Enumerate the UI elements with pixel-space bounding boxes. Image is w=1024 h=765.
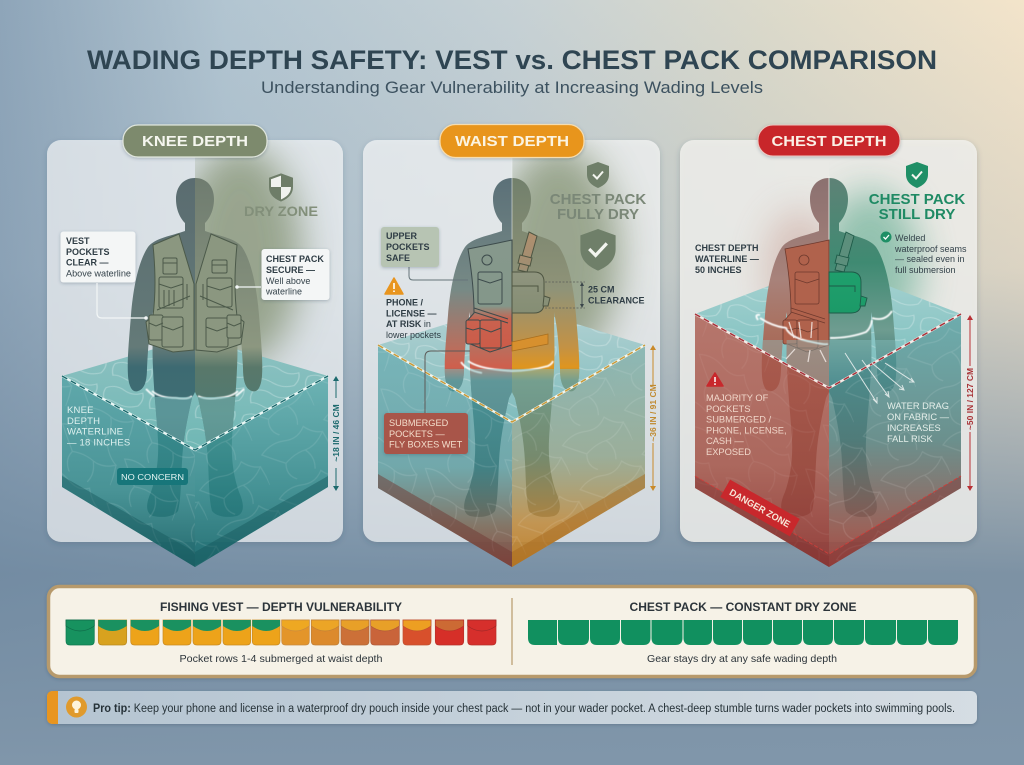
label: vest pockets clear: POCKETS (66, 247, 110, 257)
water cube (378, 345, 645, 567)
label: submerged pockets: SUBMERGED (389, 418, 449, 428)
shallow water overlay on legs (444, 369, 580, 416)
label: chest pack secure (262, 249, 330, 300)
banner: danger zone: DANGER ZONE (727, 487, 792, 530)
heading: chest pack fully dry: CHEST PACK (550, 191, 646, 208)
water surface (378, 304, 645, 422)
title: WADING DEPTH SAFETY: VEST vs. CHEST PACK COMPARISON (87, 45, 937, 75)
fishing vest half (783, 240, 829, 352)
icon: green shield (906, 162, 928, 188)
icon: large shield check (580, 229, 616, 271)
clearance marker: CLEARANCE (588, 296, 645, 306)
label: upper pockets safe: SAFE (386, 253, 410, 263)
panel: waist depth (363, 140, 660, 567)
caption: vest: Pocket rows 1-4 submerged at waist depth (180, 653, 383, 665)
text: chest depth waterline: CHEST DEPTH (695, 243, 759, 253)
label: upper pockets safe: UPPER (386, 231, 418, 241)
text: phone license at risk: AT RISK in (386, 319, 431, 329)
knee depth text: — 18 INCHES (67, 438, 130, 448)
pill: waist depth (440, 124, 584, 158)
pill: chest depth: CHEST DEPTH (772, 134, 886, 150)
waterline dashed (378, 345, 645, 422)
figure silhouette (128, 178, 262, 517)
heading: chest pack: CHEST PACK — CONSTANT DRY ZONE (630, 602, 857, 614)
label: chest pack secure: CHEST PACK (266, 254, 324, 264)
label: vest pockets clear: CLEAR — (66, 258, 108, 268)
label: submerged pockets: POCKETS — (389, 429, 445, 439)
pro tip bar (47, 691, 977, 724)
pill: knee depth: KNEE DEPTH (142, 134, 248, 150)
text: welded seams: — sealed even in (895, 254, 965, 264)
label: chest pack secure: SECURE — (266, 265, 315, 275)
heading: chest pack still dry: CHEST PACK (869, 191, 965, 208)
label: chest pack secure: Well above (266, 276, 310, 286)
label: submerged pockets: FLY BOXES WET (389, 440, 463, 450)
waterline dashed (695, 314, 961, 388)
panel: knee depth (47, 140, 343, 567)
icon: light bulb (66, 696, 87, 718)
text: majority of pockets: PHONE, LICENSE, (706, 426, 787, 436)
water surface (62, 337, 328, 450)
divider (511, 598, 513, 665)
knee depth text: KNEE (67, 405, 94, 416)
heading: chest pack still dry: STILL DRY (879, 206, 955, 223)
depth dimension (331, 376, 341, 491)
water cube (62, 376, 328, 567)
tip text: Pro tip: Keep your phone and license in a waterproof dry pouch inside your chest pack — not in your wader pocket. A chest-deep stumble turns wader pockets into swimming pools. (93, 703, 955, 715)
waterline ripple (461, 361, 553, 373)
dry zone label: DRY ZONE (244, 203, 318, 219)
center seam (828, 176, 830, 314)
heading: chest pack fully dry: FULLY DRY (557, 206, 639, 223)
figure silhouette (445, 178, 579, 517)
text: majority of pockets: POCKETS (706, 404, 750, 414)
shallow water overlay on legs (154, 397, 236, 442)
label: upper pockets safe: POCKETS (386, 242, 430, 252)
label: vest pockets clear: Above waterline (66, 268, 131, 278)
badge: no concern (117, 468, 188, 485)
icon: dry zone shield (270, 174, 292, 200)
clearance marker (545, 282, 645, 308)
chest pack glow (496, 145, 620, 365)
fishing vest half (466, 240, 512, 352)
banner: danger zone (720, 480, 800, 536)
leader: vest pockets (97, 283, 148, 320)
pill: waist depth: WAIST DEPTH (455, 134, 569, 150)
dry zone glow (178, 145, 302, 365)
wader belt (512, 334, 548, 351)
label: chest pack secure: waterline (265, 286, 302, 296)
red and green glow (765, 190, 920, 340)
text: phone license at risk: lower pockets (386, 330, 442, 340)
leader: upper pockets (409, 267, 468, 280)
icon: check circle (880, 232, 892, 242)
text: majority of pockets: EXPOSED (706, 447, 751, 457)
text: chest depth waterline: WATERLINE — (695, 254, 759, 264)
text: water drag: FALL RISK (887, 434, 933, 444)
pill: knee depth (123, 125, 267, 157)
knee depth text: DEPTH (67, 416, 100, 427)
text: welded seams: full submersion (895, 265, 956, 275)
pill: chest depth (758, 125, 900, 156)
text: phone license at risk: LICENSE — (386, 308, 437, 318)
label: upper pockets safe (381, 227, 439, 267)
text: majority of pockets: MAJORITY OF (706, 393, 769, 403)
text: water drag: ON FABRIC — (887, 412, 950, 422)
text: welded seams: waterproof seams (894, 244, 967, 254)
text: water drag: INCREASES (887, 423, 941, 433)
center seam (511, 142, 513, 345)
panel: chest depth (680, 140, 977, 567)
chest pack (829, 232, 867, 313)
depth dimension (648, 345, 658, 491)
fishing vest (146, 234, 244, 352)
text: welded seams: Welded (895, 233, 925, 243)
danger dashed line (695, 476, 961, 554)
text: chest depth waterline: 50 INCHES (695, 265, 742, 275)
water surface (695, 263, 961, 388)
chest pack (512, 232, 550, 313)
vest pocket row (66, 620, 496, 645)
depth dimension: ~36 IN / 91 CM (648, 384, 658, 442)
shallow water overlay on body (762, 340, 896, 386)
chest pack pocket row (528, 620, 958, 645)
text: majority of pockets: CASH — (706, 436, 744, 446)
clearance marker: 25 CM (588, 284, 615, 294)
heading: fishing vest: FISHING VEST — DEPTH VULNERABILITY (160, 602, 402, 614)
depth dimension (965, 315, 975, 491)
drag arrows on vest (786, 322, 826, 362)
leader: submerged (425, 351, 470, 413)
water drag arrows (845, 353, 914, 403)
icon: red warning (707, 373, 723, 386)
badge: no concern: NO CONCERN (121, 472, 184, 482)
subtitle: Understanding Gear Vulnerability at Increasing Wading Levels (261, 79, 763, 97)
panel: pocket comparison (48, 586, 976, 676)
label: submerged pockets (384, 413, 468, 454)
caption: chest pack: Gear stays dry at any safe wading depth (647, 653, 837, 665)
icon: warning triangle (385, 278, 403, 294)
waterline ripple (756, 311, 892, 344)
waterline dashed (62, 376, 328, 450)
label: vest pockets clear: VEST (66, 236, 90, 246)
text: phone license at risk: PHONE / (386, 298, 424, 308)
icon: shield check top (587, 162, 609, 188)
knee depth text: WATERLINE (67, 426, 123, 438)
label: vest pockets clear (60, 232, 136, 282)
text: majority of pockets: SUBMERGED / (706, 414, 772, 424)
leader: chest pack (235, 285, 261, 289)
depth dimension: ~18 IN / 46 CM (331, 404, 341, 462)
waterline ripple (146, 389, 244, 399)
text: water drag: WATER DRAG (887, 401, 949, 411)
depth dimension: ~50 IN / 127 CM (965, 368, 975, 430)
figure silhouette (762, 178, 896, 517)
water cube (695, 314, 961, 567)
